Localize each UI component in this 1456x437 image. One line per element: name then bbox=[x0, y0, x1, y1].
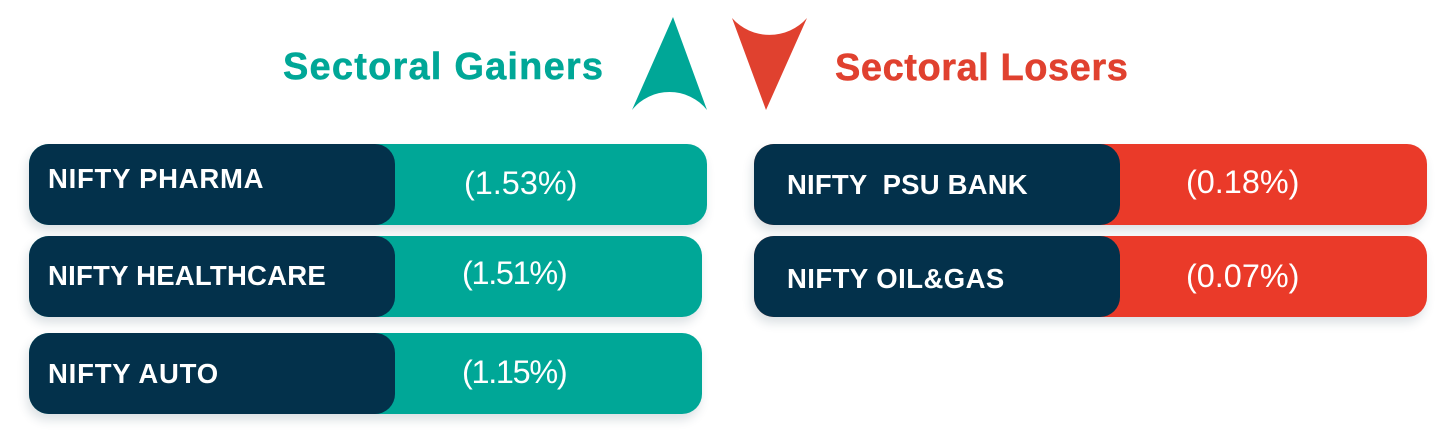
panel: nifty pharma bbox=[29, 144, 707, 225]
label background: nifty healthcare bbox=[29, 236, 395, 317]
icon: down arrow bbox=[732, 18, 807, 110]
label: nifty oil and gas: NIFTY OIL&GAS bbox=[787, 263, 1005, 294]
label background: nifty auto bbox=[29, 333, 395, 414]
label: nifty auto: NIFTY AUTO bbox=[48, 358, 219, 389]
value: 0.18%: (0.18%) bbox=[1186, 164, 1299, 200]
value: 1.53%: (1.53%) bbox=[464, 165, 577, 201]
icon: up arrow bbox=[632, 17, 707, 110]
label: nifty psu bank: NIFTY PSU BANK bbox=[787, 169, 1028, 200]
value: 1.51%: (1.51%) bbox=[462, 255, 566, 291]
heading: sectoral losers: Sectoral Losers bbox=[835, 47, 1128, 89]
value: 0.07%: (0.07%) bbox=[1186, 258, 1299, 294]
label: nifty pharma: NIFTY PHARMA bbox=[48, 163, 264, 194]
label background: nifty pharma bbox=[29, 144, 395, 225]
label: nifty healthcare: NIFTY HEALTHCARE bbox=[48, 260, 326, 291]
value: 1.15%: (1.15%) bbox=[462, 354, 566, 390]
panel: nifty oil and gas bbox=[754, 236, 1427, 317]
panel: nifty healthcare bbox=[29, 236, 702, 317]
panel: nifty psu bank bbox=[754, 144, 1427, 225]
label background: nifty oil and gas bbox=[754, 236, 1120, 317]
panel: nifty auto bbox=[29, 333, 702, 414]
heading: sectoral gainers: Sectoral Gainers bbox=[283, 46, 604, 88]
label background: nifty psu bank bbox=[754, 144, 1120, 225]
